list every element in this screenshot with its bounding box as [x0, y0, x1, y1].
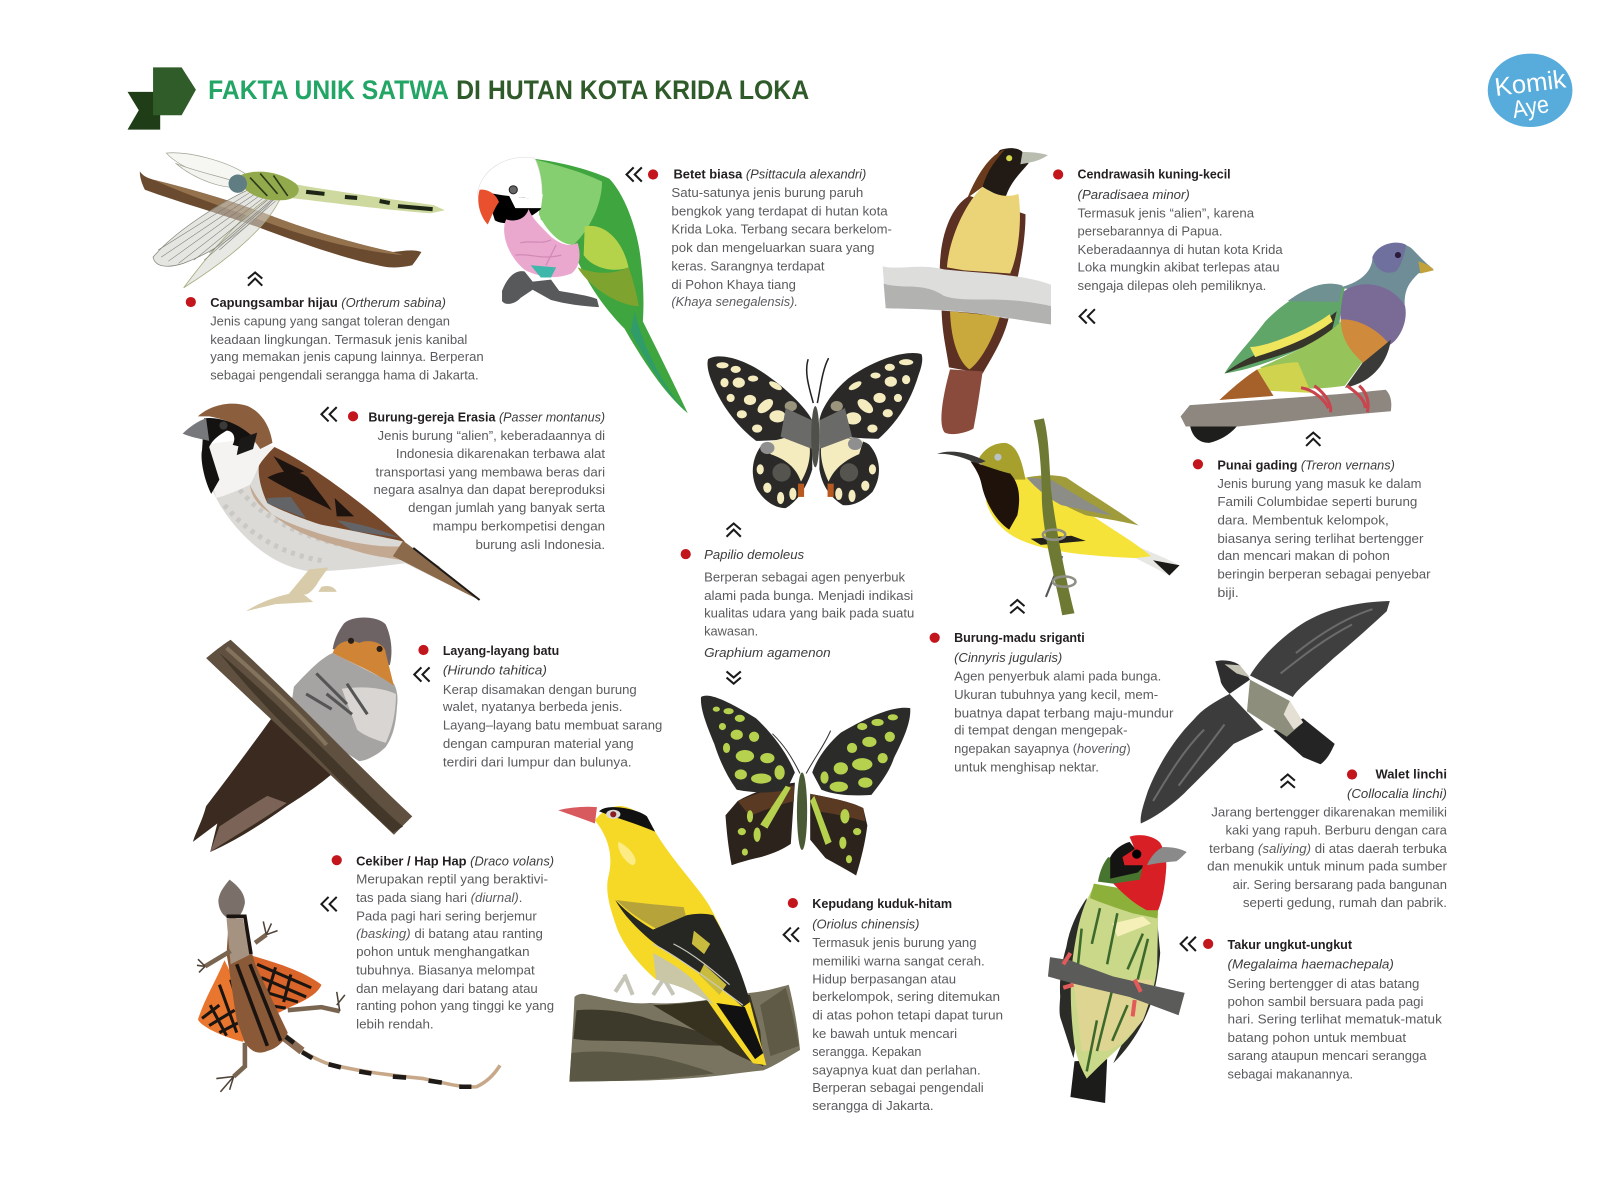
description: sebagai pengendali serangga hama di Jakarta.	[210, 368, 479, 383]
description: (basking) di batang atau ranting	[356, 926, 543, 941]
description: Jenis burung “alien”, keberadaannya di	[378, 428, 605, 443]
bullet	[1053, 169, 1063, 180]
title: DI HUTAN KOTA KRIDA LOKA	[456, 75, 809, 105]
species name: Graphium agamenon	[704, 645, 831, 660]
arrow up	[1010, 600, 1024, 613]
description: keadaan lingkungan. Termasuk jenis kanibal	[210, 332, 467, 347]
description: persebarannya di Papua.	[1078, 224, 1222, 239]
description: air. Sering bersarang pada bangunan	[1233, 877, 1447, 892]
illustration: Takur ungkut-ungkut barbet	[1048, 835, 1187, 1103]
description: Satu-satunya jenis burung paruh	[671, 185, 863, 200]
description: Hidup berpasangan atau	[812, 972, 956, 987]
arrow left	[321, 407, 337, 421]
description: Berperan sebagai pengendali	[812, 1080, 984, 1095]
description: sarang ataupun mencari serangga	[1228, 1048, 1427, 1063]
bullet	[930, 633, 940, 643]
description: lebih rendah.	[356, 1017, 434, 1032]
arrow left	[414, 667, 430, 682]
description: dara. Membentuk kelompok,	[1217, 512, 1389, 527]
illustration: dragonfly on branch	[140, 153, 445, 288]
logo: Komik Aye: Komik	[1493, 65, 1568, 102]
description: terdiri dari lumpur dan bulunya.	[443, 754, 632, 769]
species name: Takur ungkut-ungkut	[1228, 937, 1353, 952]
description: bengkok yang terdapat di hutan kota	[671, 203, 888, 218]
description: Kerap disamakan dengan burung	[443, 682, 637, 697]
description: Jarang bertengger dikarenakan memiliki	[1211, 804, 1447, 819]
arrow left	[1181, 937, 1196, 951]
description	[1217, 476, 1431, 600]
title: FAKTA UNIK SATWA	[208, 75, 449, 105]
arrow left	[321, 897, 337, 911]
description: Sering bertengger di atas batang	[1228, 976, 1419, 991]
description: tas pada siang hari (diurnal).	[356, 890, 522, 905]
description: berkelompok, sering ditemukan	[812, 989, 1000, 1004]
description: seperti gedung, rumah dan pabrik.	[1243, 895, 1447, 910]
description: sebagai makanannya.	[1228, 1067, 1353, 1082]
species name: Betet biasa (Psittacula alexandri)	[673, 167, 866, 182]
arrow up	[1306, 433, 1320, 446]
description: dan melayang dari batang atau	[356, 981, 538, 996]
arrow down	[727, 671, 741, 684]
description: buatnya dapat terbang maju-mundur	[954, 705, 1174, 720]
description: Pada pagi hari sering berjemur	[356, 908, 537, 923]
description	[1078, 205, 1283, 293]
latin name: (Oriolus chinensis)	[812, 917, 919, 932]
description: mampu berkompetisi dengan	[433, 519, 605, 534]
description: terbang (saliying) di atas daerah terbuka	[1209, 841, 1448, 856]
species name: Layang-layang batu	[443, 643, 559, 658]
description	[704, 570, 914, 639]
illustration: Cendrawasih kuning-kecil	[883, 148, 1051, 434]
description: (Khaya senegalensis).	[671, 294, 798, 309]
callout: Capungsambar hijau	[186, 272, 484, 383]
description: hari. Sering terlihat mematuk-matuk	[1228, 1011, 1442, 1026]
description: transportasi yang membawa beras dari	[376, 465, 605, 480]
description: Termasuk jenis burung yang	[812, 935, 977, 950]
description: serangga. Kepakan	[812, 1044, 921, 1059]
bullet	[348, 411, 358, 421]
illustration: Punai gading pigeon	[1181, 243, 1434, 443]
callout: Betet biasa	[627, 167, 892, 309]
species name: Burung-madu sriganti	[954, 630, 1085, 645]
arrow left	[784, 928, 799, 942]
callout: Burung-madu sriganti	[930, 600, 1174, 774]
description	[442, 682, 662, 769]
species name: Kepudang kuduk-hitam	[812, 896, 952, 911]
bullet	[332, 855, 342, 865]
arrow up	[1281, 774, 1295, 788]
description: Agen penyerbuk alami pada bunga.	[954, 669, 1161, 684]
description: Famili Columbidae seperti burung	[1217, 494, 1417, 509]
description: yang memakan jenis capung lainnya. Berperan	[210, 349, 484, 364]
bullet	[681, 549, 691, 559]
description: biasanya sering terlihat bertengger	[1217, 531, 1424, 546]
bullet	[1203, 939, 1213, 949]
description: kualitas udara yang baik pada suatu	[704, 605, 914, 620]
description: keras. Sarangnya terdapat	[671, 258, 825, 273]
description	[812, 935, 1003, 1113]
species name: Cendrawasih kuning-kecil	[1078, 167, 1231, 182]
illustration: Burung-gereja sparrow	[183, 404, 480, 611]
species name: Cekiber / Hap Hap (Draco volans)	[356, 853, 554, 868]
description: di atas pohon tetapi dapat turun	[812, 1007, 1003, 1022]
description: Krida Loka. Terbang secara berkelom-	[671, 222, 892, 237]
description: Jenis capung yang sangat toleran dengan	[210, 314, 450, 329]
illustration: Burung-madu sunbird	[937, 418, 1180, 615]
description	[1228, 976, 1442, 1082]
arrow left	[1080, 309, 1095, 323]
description: pohon untuk menghangatkan	[356, 944, 530, 959]
description: alami pada bunga. Menjadi indikasi	[704, 588, 913, 603]
description: pohon sambil bersuara pada pagi	[1228, 994, 1424, 1009]
species name: Capungsambar hijau (Ortherum sabina)	[210, 295, 446, 310]
callout: Takur ungkut-ungkut	[1181, 937, 1442, 1082]
description: serangga di Jakarta.	[812, 1098, 934, 1113]
latin name: (Hirundo tahitica)	[443, 662, 547, 677]
callout: Kepudang kuduk-hitam	[784, 896, 1003, 1113]
illustration: Papilio demoleus butterfly	[708, 353, 922, 508]
description: Layang–layang batu membuat sarang	[443, 718, 662, 733]
icon: title ribbon	[128, 67, 196, 130]
description: Jenis burung yang masuk ke dalam	[1217, 476, 1421, 491]
description	[671, 185, 892, 309]
description: di tempat dengan mengepak-	[954, 723, 1128, 738]
illustration: Kepudang kuduk-hitam oriole	[558, 806, 800, 1082]
description: Loka mungkin akibat terlepas atau	[1078, 259, 1280, 274]
logo: Komik Aye	[1488, 54, 1572, 127]
arrow left	[627, 167, 642, 182]
bullet	[788, 898, 798, 908]
species name: Punai gading (Treron vernans)	[1217, 457, 1395, 472]
callout: Cendrawasih kuning-kecil	[1053, 167, 1283, 323]
description: dan mencari makan di pohon	[1217, 548, 1390, 563]
description: pok dan mengeluarkan suara yang	[671, 240, 874, 255]
bullet	[1193, 459, 1203, 469]
description: walet, nyatanya berbeda jenis.	[442, 699, 622, 714]
illustration: Cekiber flying lizard	[197, 880, 500, 1092]
callout: Walet linchi	[1207, 767, 1448, 910]
logo: Komik Aye: Aye	[1510, 91, 1551, 124]
description: beringin berperan sebagai penyebar	[1217, 567, 1431, 582]
bullet	[186, 297, 196, 307]
description: dengan jumlah yang banyak serta	[408, 500, 606, 515]
callout: Punai gading	[1193, 433, 1431, 600]
description	[1207, 804, 1448, 910]
description: Berperan sebagai agen penyerbuk	[704, 570, 905, 585]
callout: butterflies	[681, 523, 914, 684]
description: dengan campuran material yang	[443, 736, 634, 751]
latin name: (Megalaima haemachepala)	[1228, 956, 1394, 971]
illustration: Layang-layang batu swallow	[193, 617, 412, 852]
description	[373, 428, 606, 552]
bullet	[418, 645, 429, 655]
description: sayapnya kuat dan perlahan.	[812, 1062, 981, 1077]
latin name: (Paradisaea minor)	[1078, 187, 1190, 202]
species name: Walet linchi	[1376, 767, 1447, 782]
description: biji.	[1217, 585, 1239, 600]
bullet	[648, 169, 658, 180]
species name: Papilio demoleus	[704, 547, 804, 562]
callout: Cekiber / Hap Hap	[321, 853, 554, 1032]
description	[210, 314, 484, 383]
description	[356, 872, 554, 1032]
description: ngepakan sayapnya (hovering)	[954, 741, 1131, 756]
description: tubuhnya. Biasanya melompat	[356, 962, 535, 977]
description: Merupakan reptil yang beraktivi-	[356, 872, 548, 887]
latin name: (Cinnyris jugularis)	[954, 650, 1062, 665]
description: Indonesia dikarenakan terbawa alat	[396, 446, 605, 461]
description: ke bawah untuk mencari	[812, 1026, 957, 1041]
description: dan menukik untuk minum pada sumber	[1207, 858, 1448, 873]
description: memiliki warna sangat cerah.	[812, 953, 985, 968]
description: Ukuran tubuhnya yang kecil, mem-	[954, 687, 1158, 702]
arrow up	[727, 523, 741, 537]
description: Keberadaannya di hutan kota Krida	[1078, 242, 1283, 257]
description: sengaja dilepas oleh pemiliknya.	[1078, 278, 1266, 293]
description: negara asalnya dan dapat bereproduksi	[373, 482, 605, 497]
arrow up	[248, 272, 262, 286]
description	[954, 669, 1174, 774]
callout: Layang-layang batu	[414, 643, 662, 769]
latin name: (Collocalia linchi)	[1347, 786, 1447, 801]
bullet	[1347, 769, 1357, 780]
illustration: Graphium agamenon butterfly	[701, 696, 910, 876]
description: untuk menghisap nektar.	[954, 759, 1099, 774]
species name: Burung-gereja Erasia (Passer montanus)	[368, 409, 605, 424]
description: batang pohon untuk membuat	[1228, 1030, 1406, 1045]
description: kaki yang rapuh. Berburu dengan cara	[1226, 823, 1448, 838]
callout: Burung-gereja Erasia	[321, 407, 606, 552]
description: kawasan.	[704, 624, 758, 639]
description: burung asli Indonesia.	[476, 537, 605, 552]
description: di Pohon Khaya tiang	[671, 277, 796, 292]
illustration: Walet linchi swift	[1141, 601, 1390, 823]
description: ranting pohon yang tinggi ke yang	[356, 998, 554, 1013]
illustration: Betet biasa parrot	[478, 157, 688, 413]
description: Termasuk jenis “alien”, karena	[1078, 205, 1255, 220]
